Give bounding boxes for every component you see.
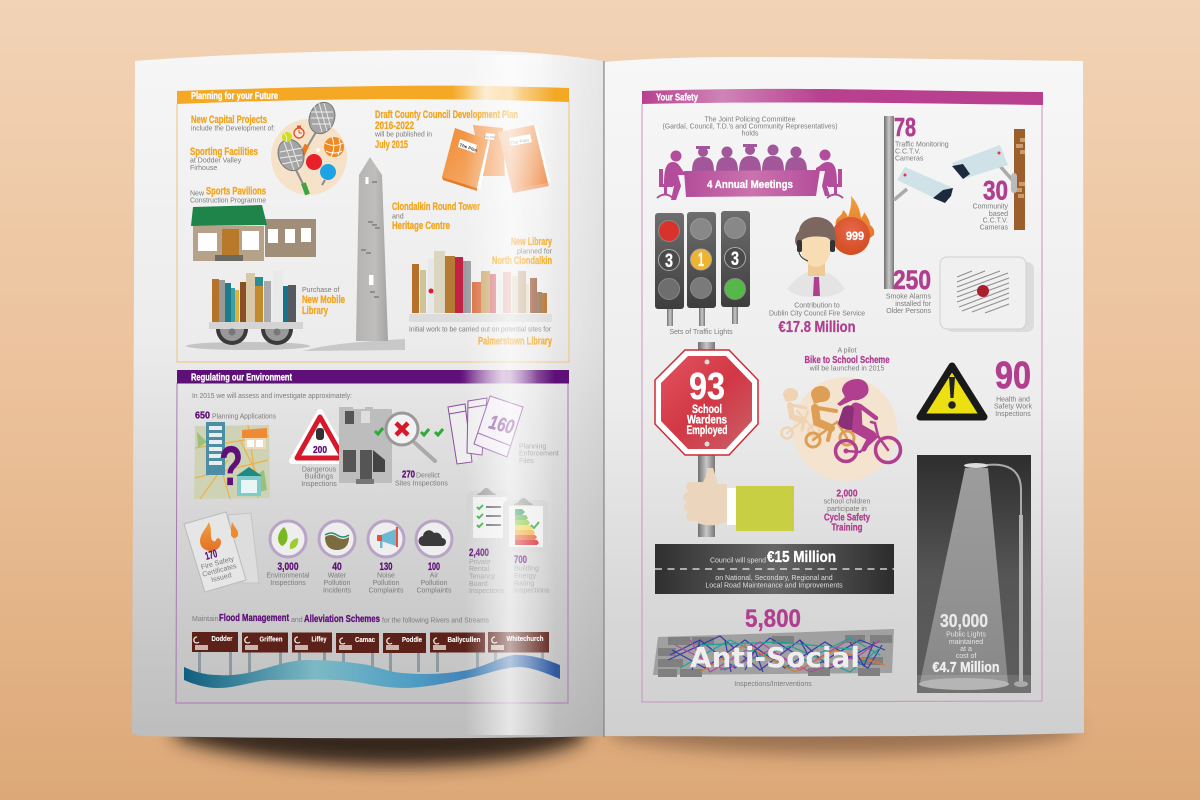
text: new library: North Clondalkin: [492, 255, 552, 267]
icon: enforcement files: 160: [487, 411, 516, 439]
stat: 3,000 environmental: [266, 521, 310, 587]
stat: 130 noise pollution: Noise: [377, 572, 395, 580]
text: enforcement files: [519, 444, 559, 465]
stat: 40 water pollution: Pollution: [324, 580, 351, 587]
icon: fire safety certificates: Certificates: [202, 563, 238, 579]
panel: road funding: €15 Million: [767, 549, 836, 566]
text: mobile library: [302, 287, 345, 317]
stat: 250 smoke alarms: 250: [893, 265, 931, 295]
text: fire service contribution: [769, 302, 865, 336]
stat: 78 traffic cctv: 78: [894, 112, 916, 142]
icon: clipboards: [467, 488, 548, 552]
icon: traffic lights: 3: [731, 249, 739, 270]
text: cycle safety training: [824, 488, 870, 534]
text: joint policing committee: holds: [742, 130, 759, 138]
stat: 40 water pollution: [319, 521, 355, 594]
icon: anti-social graffiti wall: [653, 629, 894, 677]
sign: whitechurch: Whitechurch: [506, 634, 544, 643]
stat: 130 noise pollution: Pollution: [373, 580, 400, 587]
icon: fire safety certificates: Fire Safety: [200, 556, 235, 571]
icon: stop sign with hand: [655, 342, 794, 537]
icon: pavilion building: [191, 205, 316, 261]
text: flood management: and: [291, 617, 303, 624]
text: sports pavilions: New: [190, 190, 205, 198]
stat: 100 air pollution: Air: [430, 572, 439, 580]
icon: cycling children: [782, 377, 900, 481]
icon: map: [194, 422, 270, 499]
text: mobile library: Library: [302, 305, 329, 317]
right page: [604, 57, 1084, 737]
stat: 2,400 rental: Board: [469, 581, 488, 588]
stat: 250 smoke alarms: Smoke Alarms: [886, 294, 931, 300]
stat: 100 air pollution: 100: [428, 561, 440, 573]
stat: 30,000 public lights: €4.7 Million: [932, 659, 1000, 676]
stat: 30,000 public lights: at a: [960, 646, 972, 653]
stat: 30,000 public lights: [932, 611, 1000, 676]
panel: road funding: [655, 544, 894, 594]
stat: 700 energy: [514, 554, 550, 594]
left page: [132, 50, 603, 738]
sign: liffey: Liffey: [312, 634, 327, 644]
icon: warning triangle 200: [292, 412, 348, 461]
stat: 130 noise pollution: Complaints: [368, 588, 404, 594]
text: inspections/interventions: Inspections/Interventions: [734, 681, 812, 688]
icon: stop sign with hand: Employed: [686, 425, 728, 437]
panel: road funding: on National, Secondary, Regional and: [715, 575, 833, 582]
text: bike to school: A pilot: [837, 348, 857, 354]
heading bar: planning: Planning for your Future: [191, 91, 278, 102]
stat: 90 health and safety: [994, 355, 1032, 418]
stat: 78 traffic cctv: Traffic Monitoring: [895, 142, 949, 148]
text: 650 planning applications: [195, 410, 276, 422]
icon: meeting table: 4 Annual Meetings: [707, 179, 793, 191]
icon: enforcement files: [446, 396, 523, 465]
icon: plan books: [442, 125, 550, 193]
text: draft plan: will be published in: [374, 132, 432, 138]
text: palmerstown: [409, 326, 553, 348]
stat: 40 water pollution: Incidents: [323, 588, 352, 594]
stat: 130 noise pollution: [368, 521, 404, 594]
text: dangerous buildings: [301, 466, 337, 488]
icon: fire safety certificates: 170: [204, 548, 219, 563]
text: new capital projects: [191, 114, 275, 132]
stat: 30,000 public lights: cost of: [956, 653, 976, 660]
sign: poddle: [383, 633, 426, 653]
panel: road funding: Council will spend: [710, 558, 766, 564]
icon: smoke alarm: [940, 257, 1034, 332]
icon: library books: [409, 251, 552, 322]
stat: 78 traffic cctv: C.C.T.V.: [895, 148, 920, 156]
icon: 999 operator: [787, 196, 874, 297]
text: draft plan: [374, 109, 518, 151]
stat: 30 community cctv: based: [989, 211, 1008, 218]
stat: 90 health and safety: Inspections: [995, 411, 1031, 418]
text: new library: New Library: [511, 236, 553, 248]
text: cycle safety training: Training: [832, 522, 862, 534]
text: sporting facilities: Firhouse: [190, 165, 217, 172]
text: sets of traffic lights: Sets of Traffic Lights: [669, 329, 733, 336]
river: [184, 655, 560, 688]
text: sports pavilions: [190, 186, 266, 204]
text: enforcement files: Planning: [519, 444, 546, 450]
stat: 90 health and safety: 90: [995, 355, 1031, 397]
stat: 250 smoke alarms: Older Persons: [886, 308, 931, 315]
sign: dodder: Dodder: [212, 634, 233, 643]
stat: 2,400 rental: Rental: [469, 566, 490, 573]
sign: griffeen: [242, 632, 288, 652]
text: dangerous buildings: Buildings: [305, 474, 334, 480]
text: bike to school: will be launched in 2015: [809, 366, 884, 372]
sign: camac: [336, 633, 379, 653]
sign: ballycullen: [430, 632, 485, 652]
text: intro: In 2015 we will assess and investigate approximately:: [192, 393, 352, 400]
panel: regulating our environment: [176, 370, 569, 703]
text: flood management: Flood Management: [219, 612, 289, 624]
stat: 700 energy: 700: [514, 554, 527, 566]
text: flood management: for the following Rivers and Streams: [382, 618, 489, 624]
icon: warning sign: [920, 366, 984, 417]
panel: street lighting: [917, 455, 1031, 693]
stat: 3,000 environmental: Inspections: [270, 580, 306, 587]
icon: plan books: The Plan: [459, 142, 478, 153]
stat: 2,400 rental: Tenancy: [469, 574, 496, 580]
heading bar: regulating: Regulating our Environment: [191, 372, 292, 384]
icon: traffic lights: [655, 211, 750, 326]
stat: 30,000 public lights: maintained: [949, 639, 983, 646]
icon: meeting table: [657, 144, 843, 200]
stat: 700 energy: Inspections: [514, 588, 550, 594]
text: mobile library: New Mobile: [302, 294, 345, 306]
text: round tower: Clondalkin Round Tower: [392, 201, 480, 213]
text: new library: planned for: [517, 248, 553, 256]
text: round tower: and: [392, 214, 404, 220]
text: draft plan: July 2015: [375, 139, 408, 151]
text: dangerous buildings: Inspections: [301, 481, 337, 488]
text: palmerstown: Initial work to be carried out on potential sites for: [409, 326, 552, 334]
icon: mobile library: [186, 270, 310, 350]
text: flood management: [192, 612, 489, 625]
icon: fire safety certificates: [184, 512, 259, 592]
text: fire service contribution: Dublin City Council Fire Service: [769, 310, 865, 318]
sign: ballycullen: Ballycullen: [448, 635, 481, 644]
icon: cctv cameras: [884, 116, 1025, 289]
icon: plan books: The Plan: [510, 137, 530, 146]
text: new library: [492, 236, 553, 267]
text: sports pavilions: Construction Programme: [190, 198, 266, 204]
stat: 78 traffic cctv: [894, 112, 949, 162]
sign: dodder: [192, 632, 238, 652]
text: fire service contribution: €17.8 Million: [778, 319, 856, 336]
icon: stop sign with hand: Wardens: [687, 414, 727, 426]
panel: planning for your future: [177, 86, 569, 362]
stat: 2,400 rental: 2,400: [469, 547, 489, 559]
text: mobile library: Purchase of: [302, 287, 339, 294]
stat: 90 health and safety: Safety Work: [994, 404, 1032, 410]
stat: 30,000 public lights: Public Lights: [946, 632, 986, 638]
stat: 2,400 rental: Inspections: [469, 588, 505, 595]
text: cycle safety training: school children: [824, 498, 870, 506]
text: enforcement files: Files: [519, 458, 534, 465]
icon: traffic lights: 3: [665, 251, 673, 272]
stat: 250 smoke alarms: [886, 265, 932, 315]
stat: 30,000 public lights: 30,000: [940, 611, 988, 631]
heading bar: planning: [177, 86, 569, 104]
icon: warning triangle 200: 200: [313, 445, 327, 456]
text: 270 derelict: Sites Inspections: [395, 480, 448, 488]
text: 650 planning applications: 650: [195, 410, 210, 422]
stat: 40 water pollution: 40: [332, 561, 342, 573]
icon: plan books: The Plan: [484, 135, 496, 139]
text: dangerous buildings: Dangerous: [302, 466, 337, 474]
heading bar: regulating: [177, 370, 569, 384]
text: 650 planning applications: Planning Applications: [212, 414, 276, 420]
stat: 100 air pollution: Pollution: [421, 580, 448, 587]
icon: fire safety certificates: Issued: [211, 572, 232, 584]
icon: derelict building with magnifier: [339, 407, 443, 484]
text: bike to school: [804, 348, 890, 372]
stat: 700 energy: Rating: [514, 580, 534, 588]
stat: 30 community cctv: Cameras: [980, 224, 1008, 232]
text: new capital projects: include the Development of:: [191, 126, 275, 132]
icon: stop sign with hand: 93: [689, 366, 725, 408]
sign: griffeen: Griffeen: [260, 634, 283, 644]
text: 270 derelict: 270: [402, 468, 415, 480]
stat: 2,400 rental: [469, 547, 505, 595]
text: sporting facilities: Sporting Facilities: [190, 146, 258, 158]
text: flood management: Alleviation Schemes: [304, 613, 380, 625]
panel: road funding: Local Road Maintenance and Improvements: [705, 582, 843, 590]
text: joint policing committee: (Gardaí, Council, T.D.'s and Community Representatives): [662, 124, 838, 130]
icon: traffic lights: 1: [698, 250, 704, 271]
heading bar: your safety: [642, 89, 1043, 105]
stat: 3,000 environmental: Environmental: [266, 572, 310, 580]
text: fire service contribution: Contribution to: [794, 302, 840, 310]
stat: 30 community cctv: C.C.T.V.: [983, 218, 1008, 224]
page shadow: [175, 722, 1075, 766]
text: cycle safety training: participate in: [827, 506, 867, 513]
stat: 130 noise pollution: 130: [380, 561, 392, 573]
stat: 30 community cctv: [973, 176, 1008, 232]
icon: round tower: [303, 157, 405, 351]
icon: anti-social graffiti wall: Anti-Social: [690, 641, 860, 674]
icon: sports equipment: [271, 99, 347, 195]
stat: 2,400 rental: Private: [469, 559, 491, 566]
heading bar: your safety: Your Safety: [656, 92, 698, 104]
icon: map: ?: [219, 434, 243, 497]
stat: 100 air pollution: Complaints: [416, 588, 452, 594]
text: 270 derelict: Derelict: [416, 472, 440, 480]
text: enforcement files: Enforcement: [519, 450, 559, 458]
text: cycle safety training: 2,000: [836, 488, 858, 500]
stat: 3,000 environmental: 3,000: [278, 561, 298, 573]
panel: your safety: [642, 89, 1043, 702]
text: sporting facilities: at Dodder Valley: [190, 158, 242, 164]
sign: whitechurch: [488, 632, 549, 652]
icon: stop sign with hand: School: [692, 404, 722, 416]
stat: 700 energy: Energy: [514, 573, 537, 580]
text: sports pavilions: Sports Pavilions: [206, 186, 266, 198]
text: cycle safety training: Cycle Safety: [824, 512, 870, 524]
stat: 250 smoke alarms: installed for: [895, 301, 932, 308]
text: joint policing committee: The Joint Policing Committee: [704, 116, 796, 124]
text: 270 derelict: [395, 468, 448, 488]
text: draft plan: 2016-2022: [375, 120, 414, 132]
chart: river signs: [184, 632, 560, 688]
stat: 5,800: 5,800: [745, 605, 801, 633]
text: sporting facilities: [190, 146, 258, 172]
spine: [603, 61, 605, 737]
text: new capital projects: New Capital Projects: [191, 114, 267, 126]
stat: 30 community cctv: Community: [973, 204, 1008, 210]
icon: 999 operator: 999: [846, 229, 864, 243]
text: bike to school: Bike to School Scheme: [804, 354, 890, 366]
stat: 90 health and safety: Health and: [996, 396, 1030, 404]
stat: 78 traffic cctv: Cameras: [895, 156, 924, 162]
page gloss: [465, 55, 555, 735]
text: flood management: Maintain: [192, 616, 219, 623]
sign: liffey: [292, 632, 332, 652]
sign: poddle: Poddle: [402, 635, 422, 644]
stat: 30 community cctv: 30: [983, 176, 1008, 206]
stat: 40 water pollution: Water: [328, 572, 347, 580]
text: palmerstown: Palmerstown Library: [478, 336, 553, 348]
text: draft plan: Draft County Council Development Plan: [375, 109, 518, 121]
stat: 700 energy: Building: [514, 566, 539, 572]
text: round tower: [392, 201, 480, 232]
stat: 100 air pollution: [416, 521, 452, 594]
text: joint policing committee: [662, 116, 838, 138]
sign: camac: Camac: [355, 635, 375, 644]
text: round tower: Heritage Centre: [392, 220, 450, 232]
